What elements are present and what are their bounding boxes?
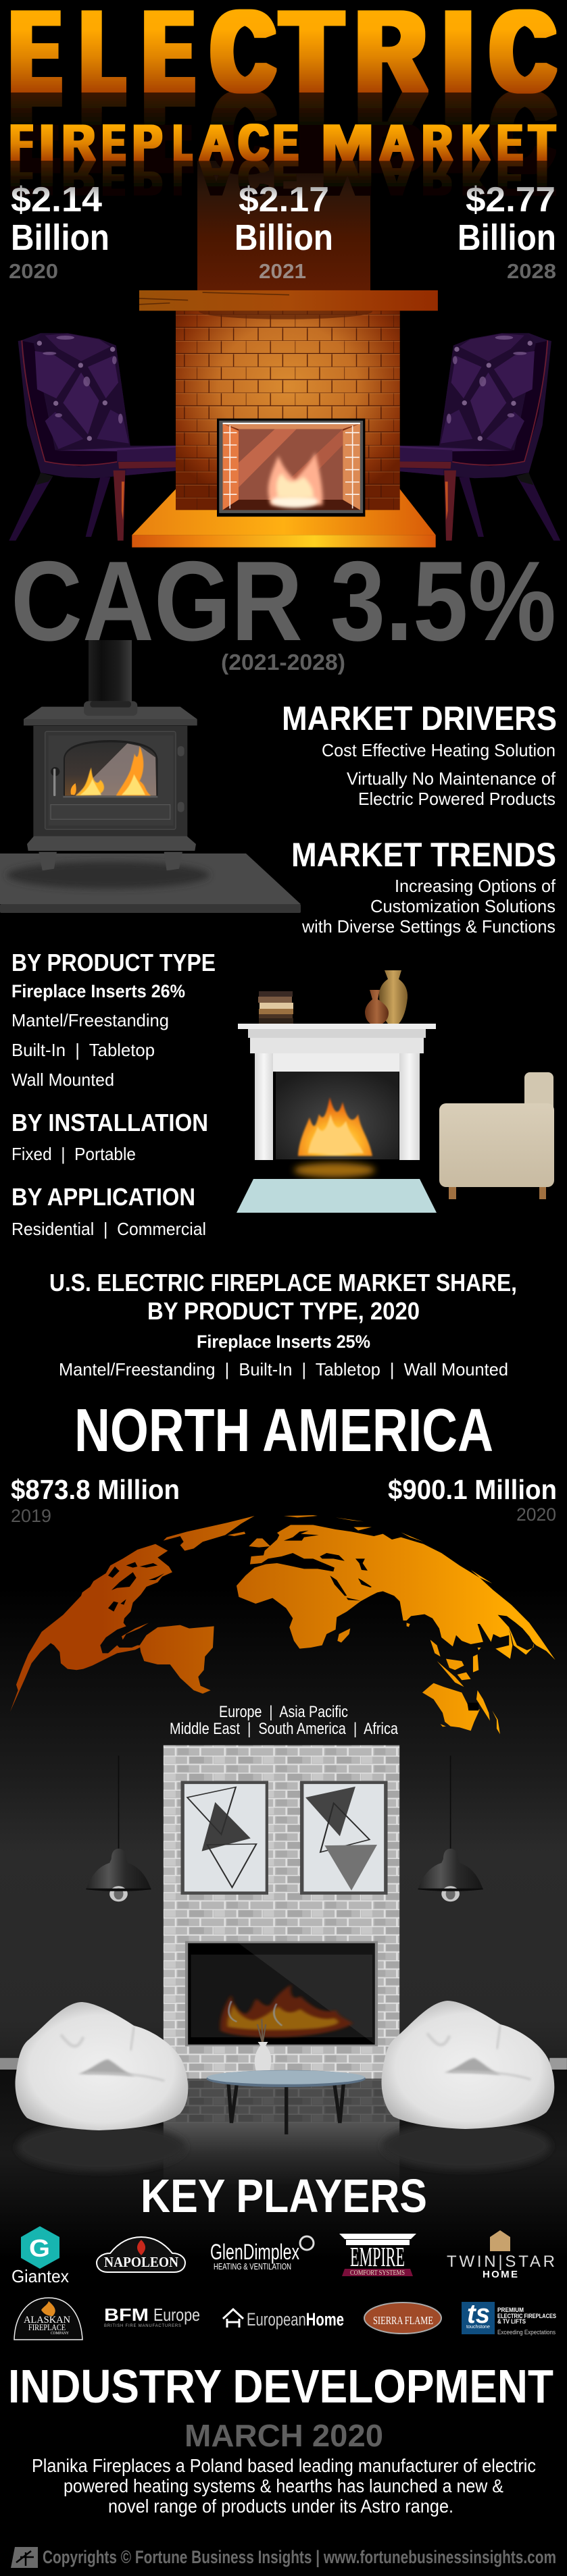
- title reflection: fireplace market: A: [380, 149, 414, 206]
- title line: fireplace market: K: [462, 114, 489, 171]
- title line: fireplace market: R: [422, 114, 452, 171]
- development description: [32, 2455, 536, 2517]
- title line: fireplace market: I: [39, 114, 54, 171]
- title line: fireplace market: T: [529, 114, 555, 171]
- market drivers: [282, 700, 557, 809]
- continent: africa and eurasia: [237, 1525, 556, 1660]
- stat 2021: [235, 180, 333, 283]
- us market share block: [49, 1269, 517, 1379]
- continent: south america: [140, 1625, 214, 1693]
- stove fire window: [63, 740, 157, 797]
- logo: bfm europe: Europe: [153, 2305, 200, 2325]
- logo: sierra flame: SIERRA FLAME: [373, 2314, 433, 2327]
- logo: alaskan fireplace: [14, 2298, 82, 2340]
- logo: empire: COMFORT SYSTEMS: [350, 2269, 405, 2277]
- CAGR headline: (2021-2028): [221, 650, 345, 675]
- title reflection: electric: [11, 68, 554, 196]
- title line: fireplace market: A: [199, 114, 233, 171]
- logo: alaskan fireplace: COMPANY: [51, 2332, 70, 2336]
- segment: by application: BY APPLICATION: [11, 1183, 195, 1211]
- beanbag right: [381, 2001, 554, 2129]
- title reflection: fireplace market: R: [62, 149, 95, 206]
- floor glow: [294, 1163, 375, 1178]
- title reflection: fireplace market: R: [422, 149, 452, 206]
- pendant lamp left: [86, 1756, 151, 1901]
- us market share block: Fireplace Inserts 25%: [197, 1332, 370, 1352]
- title line: fireplace market: E: [103, 114, 125, 171]
- title reflection: fireplace market: C: [239, 149, 268, 206]
- illustration: brick fireplace: [132, 290, 438, 548]
- islands: madagascar, uk, arctic: [249, 1515, 535, 1655]
- logo: twin star home: [447, 2230, 555, 2280]
- illustration: armchair: [439, 1072, 554, 1199]
- segment: by installation: Fixed | Portable: [11, 1144, 136, 1164]
- stat 2028: $2.77: [466, 180, 556, 219]
- stat 2021: $2.17: [239, 180, 329, 219]
- title reflection: electric: C: [212, 68, 274, 196]
- mantel shelf: [139, 290, 438, 319]
- floor: [0, 2070, 567, 2259]
- key players logos: [11, 2226, 556, 2340]
- logo: touchstone: & TV LIFTS: [497, 2318, 526, 2325]
- logo: glen dimplex: GlenDimplex: [210, 2240, 299, 2264]
- logo: glen dimplex: [210, 2236, 314, 2271]
- brick column: [164, 1745, 399, 2122]
- north america values: $900.1 Million: [388, 1474, 557, 1505]
- logo: napoleon: NAPOLEON: [104, 2254, 178, 2270]
- logo: alaskan fireplace: FIREPLACE: [28, 2322, 66, 2332]
- glass table: [206, 2070, 366, 2134]
- illustration: white mantel fireplace: [237, 970, 437, 1213]
- beanbag floor reflections: [17, 2122, 551, 2172]
- title reflection: fireplace market: T: [529, 149, 555, 206]
- afro-eurasia and oceania: [237, 1515, 556, 1734]
- segment: by product type: BY PRODUCT TYPE: [11, 949, 216, 976]
- title reflection: fireplace market: P: [132, 149, 162, 206]
- segment: by application: [11, 1183, 206, 1239]
- segment: by installation: BY INSTALLATION: [11, 1109, 208, 1136]
- hearth: [132, 489, 436, 548]
- logo: empire: [339, 2234, 416, 2277]
- stat 2028: [458, 180, 556, 283]
- title reflection: fireplace market: M: [322, 149, 373, 206]
- stove top plate: [24, 701, 197, 725]
- stat 2020: 2020: [9, 259, 58, 283]
- firebox: [217, 419, 365, 517]
- development description: novel range of products under its Astro range.: [108, 2496, 453, 2517]
- mantel surround: [238, 1024, 436, 1160]
- logo: napoleon: [97, 2237, 185, 2272]
- room wall background: [0, 1587, 567, 2070]
- illustration: wood stove: [24, 701, 197, 870]
- world map: [10, 1515, 556, 1734]
- pendant lamp right: [418, 1756, 483, 1901]
- market drivers: Cost Effective Heating Solution: [322, 740, 556, 760]
- title reflection: fireplace market: E: [103, 149, 125, 206]
- segment: by product type: [11, 949, 216, 1090]
- books: [258, 991, 293, 1024]
- title reflection: electric: E: [11, 68, 59, 196]
- logo: empire: EMPIRE: [350, 2241, 405, 2272]
- stat 2020: Billion: [11, 217, 109, 258]
- chair: right: [394, 333, 560, 541]
- north america values: $873.8 Million: [11, 1474, 180, 1505]
- segment: by product type: Wall Mounted: [11, 1070, 114, 1090]
- vase with twigs: [255, 2019, 271, 2078]
- title reflection: electric: T: [282, 68, 341, 196]
- us market share block: Mantel/Freestanding | Built-In | Tabletop | Wall Mounted: [59, 1359, 508, 1379]
- title line: fireplace market: R: [62, 114, 95, 171]
- north america values: 2019: [11, 1506, 51, 1526]
- title reflection: electric: R: [357, 68, 425, 196]
- other regions list: Europe | Asia Pacific: [219, 1703, 348, 1721]
- title reflection: fireplace market: K: [462, 149, 489, 206]
- logo: sierra flame: [364, 2303, 441, 2334]
- title line: fireplace market: [10, 114, 555, 171]
- title line: fireplace market: E: [497, 114, 522, 171]
- title reflection: fireplace market: A: [199, 149, 233, 206]
- americas: [10, 1516, 255, 1712]
- segment: by product type: Mantel/Freestanding: [11, 1010, 169, 1030]
- development description: powered heating systems & hearths has launched a new &: [64, 2475, 503, 2496]
- logo: bfm europe: BFM: [104, 2305, 149, 2325]
- title reflection: electric: E: [145, 68, 193, 196]
- logo: touchstone: ELECTRIC FIREPLACES: [497, 2313, 556, 2319]
- logo: bfm europe: [104, 2305, 200, 2328]
- title line: electric: [11, 0, 554, 116]
- title reflection: fireplace market: E: [497, 149, 522, 206]
- logo: touchstone: touchstone: [466, 2325, 490, 2330]
- segment: by application: Residential | Commercial: [11, 1219, 206, 1239]
- market trends: Customization Solutions: [370, 896, 556, 916]
- title line: fireplace market: F: [10, 114, 32, 171]
- islands: southeast asia: [430, 1639, 500, 1734]
- framed art right: [300, 1781, 388, 1895]
- logo: touchstone: Exceeding Expectations: [497, 2329, 556, 2336]
- title line: fireplace market: M: [322, 114, 373, 171]
- skirting right: [549, 2058, 567, 2070]
- column floor reflection: [164, 2122, 399, 2184]
- north america values: [11, 1474, 557, 1526]
- development date: MARCH 2020: [184, 2418, 383, 2453]
- title reflection: fireplace market: [10, 149, 555, 206]
- stat 2028: Billion: [458, 217, 556, 258]
- icon: fortune business insights logo: [11, 2547, 38, 2568]
- chair: left: [9, 333, 176, 541]
- segment: by product type: Fireplace Inserts 26%: [11, 981, 185, 1001]
- brick chimney: [176, 311, 400, 510]
- logo: touchstone: ts: [467, 2299, 490, 2329]
- chairs: [9, 333, 560, 541]
- us market share block: U.S. ELECTRIC FIREPLACE MARKET SHARE,: [49, 1269, 517, 1296]
- vases: [365, 970, 408, 1024]
- logo: european home: EuropeanHome: [247, 2309, 344, 2330]
- title reflection: fireplace market: L: [174, 149, 192, 206]
- north america values: 2020: [516, 1504, 556, 1525]
- market drivers: Electric Powered Products: [358, 789, 556, 809]
- segment: by product type: Built-In | Tabletop: [11, 1040, 155, 1060]
- logo: glen dimplex: HEATING & VENTILATION: [214, 2261, 291, 2271]
- logo: giantex: [11, 2226, 69, 2286]
- title reflection: fireplace market: E: [274, 149, 298, 206]
- stove body: [27, 726, 196, 870]
- other regions list: Middle East | South America | Africa: [170, 1720, 399, 1738]
- us market share block: BY PRODUCT TYPE, 2020: [147, 1297, 420, 1325]
- rug: [237, 1179, 437, 1213]
- key players heading: KEY PLAYERS: [141, 2170, 427, 2222]
- stat 2021: Billion: [235, 217, 333, 258]
- title reflection: electric: L: [82, 68, 123, 196]
- title line: fireplace market: C: [239, 114, 268, 171]
- logo: touchstone: PREMIUM: [497, 2307, 524, 2313]
- logo: bfm europe: BRITISH FIRE MANUFACTURERS: [104, 2324, 181, 2328]
- logo: twin star home: TWIN|STAR: [447, 2253, 555, 2271]
- segment: by installation: [11, 1109, 208, 1164]
- market trends: Increasing Options of: [395, 876, 556, 896]
- continent: north america: [10, 1544, 172, 1712]
- stove slab: [0, 853, 301, 913]
- other regions list: [170, 1703, 399, 1738]
- flames: [298, 1097, 372, 1156]
- continent: greenland: [164, 1516, 255, 1551]
- title reflection: fireplace market: F: [10, 149, 32, 206]
- logo: touchstone: [462, 2299, 556, 2336]
- title line: fireplace market: A: [380, 114, 414, 171]
- title line: fireplace market: E: [274, 114, 298, 171]
- market trends: with Diverse Settings & Functions: [301, 916, 556, 937]
- logo: twin star home: HOME: [483, 2269, 518, 2280]
- beanbag left: [15, 2002, 188, 2130]
- skirting left: [0, 2058, 22, 2070]
- electric fireplace: [185, 1941, 378, 2047]
- stove pipe: [89, 640, 132, 708]
- market size figures: [9, 180, 556, 283]
- title reflection: fireplace market: I: [39, 149, 54, 206]
- title line: fireplace market: L: [174, 114, 192, 171]
- footer: [11, 2547, 556, 2568]
- stat 2021: 2021: [259, 259, 306, 283]
- title reflection: electric: I: [443, 68, 473, 196]
- title line: fireplace market: P: [132, 114, 162, 171]
- logo: giantex: G: [29, 2234, 50, 2262]
- market drivers: Virtually No Maintenance of: [347, 768, 556, 789]
- stat 2028: 2028: [507, 259, 556, 283]
- stat 2020: [9, 180, 109, 283]
- framed art left: [180, 1781, 268, 1895]
- market trends: [291, 836, 556, 937]
- stat 2020: $2.14: [11, 180, 102, 219]
- continent: australia: [422, 1683, 480, 1731]
- illustration: living room: [0, 1745, 567, 2184]
- logo: giantex: Giantex: [11, 2266, 69, 2286]
- chimney breast: [197, 161, 370, 290]
- logo: alaskan fireplace: ALASKAN: [24, 2315, 70, 2325]
- title: [10, 0, 555, 206]
